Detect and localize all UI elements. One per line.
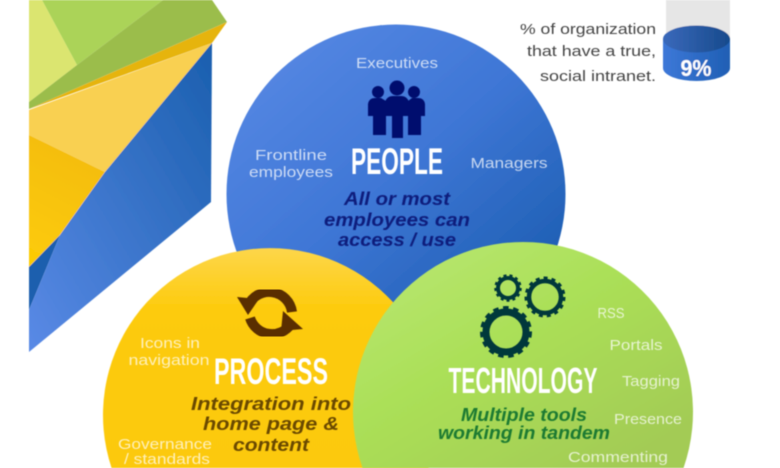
label: icons in navigation: Icons in: [140, 335, 200, 352]
callout text: % of organization: [520, 22, 656, 38]
callout text: that have a true,: [527, 44, 656, 60]
icon: refresh arrows: [237, 292, 303, 334]
callout: share of organizations with a true social intranet: [520, 0, 730, 85]
text: people description: access / use: [338, 230, 456, 250]
text: process description: [191, 394, 351, 455]
heading: process: PROCESS: [214, 351, 328, 392]
callout text: [520, 22, 656, 85]
decorative folded ribbon shape: [29, 0, 227, 352]
panel: process circle: [103, 248, 437, 468]
cylinder gauge showing 9%: [663, 0, 730, 81]
text: people description: All or most: [343, 189, 451, 209]
label: frontline employees: employees: [249, 164, 333, 181]
label: governance standards: [118, 436, 212, 468]
text: process description: home page &: [203, 414, 339, 434]
cylinder gauge showing 9%: 9%: [680, 55, 712, 81]
icon: group of people: [368, 80, 425, 138]
label: governance standards: Governance: [118, 436, 212, 453]
panel: technology circle: [353, 242, 693, 468]
label list: technology tools: Commenting: [568, 449, 668, 466]
label: frontline employees: [249, 147, 333, 181]
icon: gears: [482, 276, 564, 356]
label: icons in navigation: navigation: [128, 352, 210, 369]
text: process description: Integration into: [191, 394, 351, 414]
text: people description: employees can: [324, 210, 470, 230]
label list: technology tools: Tagging: [622, 373, 680, 390]
text: technology description: working in tandem: [438, 423, 610, 443]
label: icons in navigation: [128, 335, 210, 369]
text: people description: [324, 189, 470, 250]
label: managers: Managers: [470, 155, 548, 172]
label: frontline employees: Frontline: [255, 147, 327, 164]
panel: people circle: [226, 24, 566, 364]
text: technology description: [438, 405, 610, 443]
label list: technology tools: Presence: [614, 411, 682, 428]
label list: technology tools: RSS: [598, 305, 624, 322]
label list: technology tools: [568, 305, 682, 466]
text: process description: content: [233, 435, 310, 455]
label list: technology tools: Portals: [610, 337, 662, 354]
heading: people: PEOPLE: [351, 141, 443, 182]
label: governance standards: / standards: [124, 451, 210, 468]
text: technology description: Multiple tools: [461, 405, 587, 425]
heading: technology: TECHNOLOGY: [448, 360, 598, 401]
label: executives: Executives: [356, 55, 438, 72]
callout text: social intranet.: [540, 69, 656, 85]
